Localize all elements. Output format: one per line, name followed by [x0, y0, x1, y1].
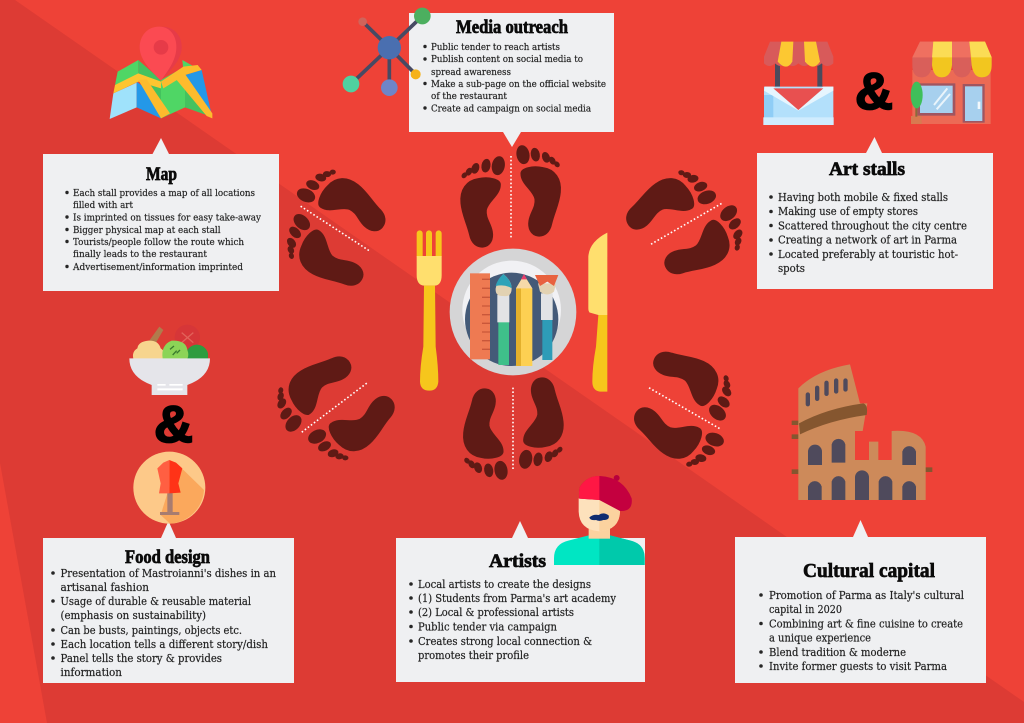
text block: food design bullets: artisanal fashion	[60, 581, 149, 594]
text block: media bullets: spread awareness	[431, 67, 511, 78]
text block: food design bullets: Panel tells the story & provides	[60, 652, 222, 665]
pencil	[516, 274, 532, 366]
text block: artists bullets	[409, 578, 617, 662]
panel: map	[43, 138, 279, 291]
text block: cultural capital bullets: capital in 2020	[769, 603, 842, 616]
text block: artists bullets: (2) Local & professional artists	[418, 606, 574, 619]
text block: cultural capital bullets: Combining art & fine cuisine to create	[769, 618, 963, 630]
text block: food design bullets	[51, 567, 276, 679]
footprints: top	[461, 145, 560, 247]
text block: map bullets: Tourists/people follow the route which	[73, 237, 244, 248]
icon: fixed store	[911, 42, 992, 124]
text block: cultural capital bullets: Invite former guests to visit Parma	[769, 660, 948, 673]
text block: artists bullets: Public tender via campaign	[418, 620, 557, 634]
text block: food design bullets: Usage of durable & reusable material	[60, 595, 251, 608]
footprints: top left	[264, 159, 403, 297]
icon: plate with art tools	[450, 249, 576, 375]
text block: artists bullets: promotes their profile	[418, 649, 529, 662]
text block: art stalls bullets: Having both mobile & fixed stalls	[778, 191, 948, 204]
ampersand: stalls: &	[855, 63, 893, 121]
text block: map bullets: finally leads to the restaurant	[73, 249, 207, 260]
icon: artist	[554, 475, 645, 565]
text block: cultural capital bullets: Blend tradition & moderne	[769, 646, 906, 659]
text block: food design bullets: information	[60, 666, 122, 679]
heading: media outreach: Media outreach	[456, 18, 569, 38]
heading: artists: Artists	[489, 552, 546, 572]
text block: media bullets: Make a sub-page on the official website	[431, 79, 606, 90]
ruler	[470, 273, 490, 359]
footprints: top right	[618, 155, 755, 291]
text block: map bullets: filled with art	[73, 200, 133, 211]
panel: artists	[396, 521, 645, 682]
text block: cultural capital bullets: a unique experience	[769, 632, 871, 644]
icon: map with pin	[110, 27, 212, 119]
text block: art stalls bullets: Located preferably at touristic hot-	[778, 248, 958, 261]
heading: art stalls: Art stalls	[829, 160, 905, 180]
text block: map bullets: Is imprinted on tissues for easy take-away	[73, 212, 262, 224]
text block: food design bullets: Each location tells a different story/dish	[60, 638, 268, 651]
text block: artists bullets: Creates strong local connection &	[418, 635, 592, 648]
ampersand: food design: &	[154, 396, 193, 454]
text block: artists bullets: (1) Students from Parma's art academy	[418, 592, 617, 605]
text block: food design bullets: Presentation of Mastroianni's dishes in an	[60, 567, 276, 580]
text block: media bullets: Public tender to reach artists	[431, 42, 560, 53]
text block: artists bullets: Local artists to create the designs	[418, 578, 591, 591]
heading: map: Map	[146, 165, 177, 185]
text block: cultural capital bullets	[759, 589, 965, 673]
icon: colosseum	[792, 364, 932, 500]
icon: mannequin circle	[133, 452, 205, 524]
icon: mobile stall	[763, 42, 834, 125]
panel: media outreach	[409, 13, 614, 147]
text block: art stalls bullets: spots	[778, 262, 805, 275]
brush: blue	[535, 275, 558, 360]
text block: art stalls bullets: Creating a network of art in Parma	[778, 234, 958, 246]
brush: green	[496, 274, 512, 365]
text block: map bullets: Advertisement/information imprinted	[72, 262, 243, 273]
text block: media bullets	[423, 42, 606, 114]
footprints: bottom left	[264, 338, 404, 479]
text block: map bullets: Bigger physical map at each stall	[73, 225, 220, 236]
footprints: bottom	[464, 378, 563, 480]
panel: cultural capital	[735, 520, 986, 683]
heading: food design: Food design	[125, 548, 211, 568]
heading: cultural capital: Cultural capital	[803, 560, 935, 582]
text block: media bullets: of the restaurant	[431, 91, 507, 102]
text block: art stalls bullets: Scattered throughout the city centre	[778, 220, 967, 232]
text block: media bullets: Publish content on social media to	[431, 54, 583, 65]
text block: cultural capital bullets: Promotion of Parma as Italy's cultural	[769, 589, 965, 602]
panel: food design	[43, 521, 294, 683]
text block: media bullets: Create ad campaign on social media	[431, 104, 591, 114]
text block: map bullets: Each stall provides a map of all locations	[73, 188, 255, 199]
icon: salad bowl	[129, 325, 210, 395]
icon: media network	[343, 8, 431, 96]
footprints: bottom right	[616, 340, 754, 476]
text block: food design bullets: (emphasis on sustainability)	[60, 609, 206, 622]
text block: art stalls bullets	[769, 191, 967, 275]
panel: art stalls	[757, 137, 993, 289]
text block: map bullets	[65, 188, 262, 273]
text block: food design bullets: Can be busts, paintings, objects etc.	[60, 624, 242, 637]
icon: fork	[417, 230, 442, 391]
text block: art stalls bullets: Making use of empty stores	[778, 205, 918, 218]
icon: knife	[588, 233, 607, 392]
